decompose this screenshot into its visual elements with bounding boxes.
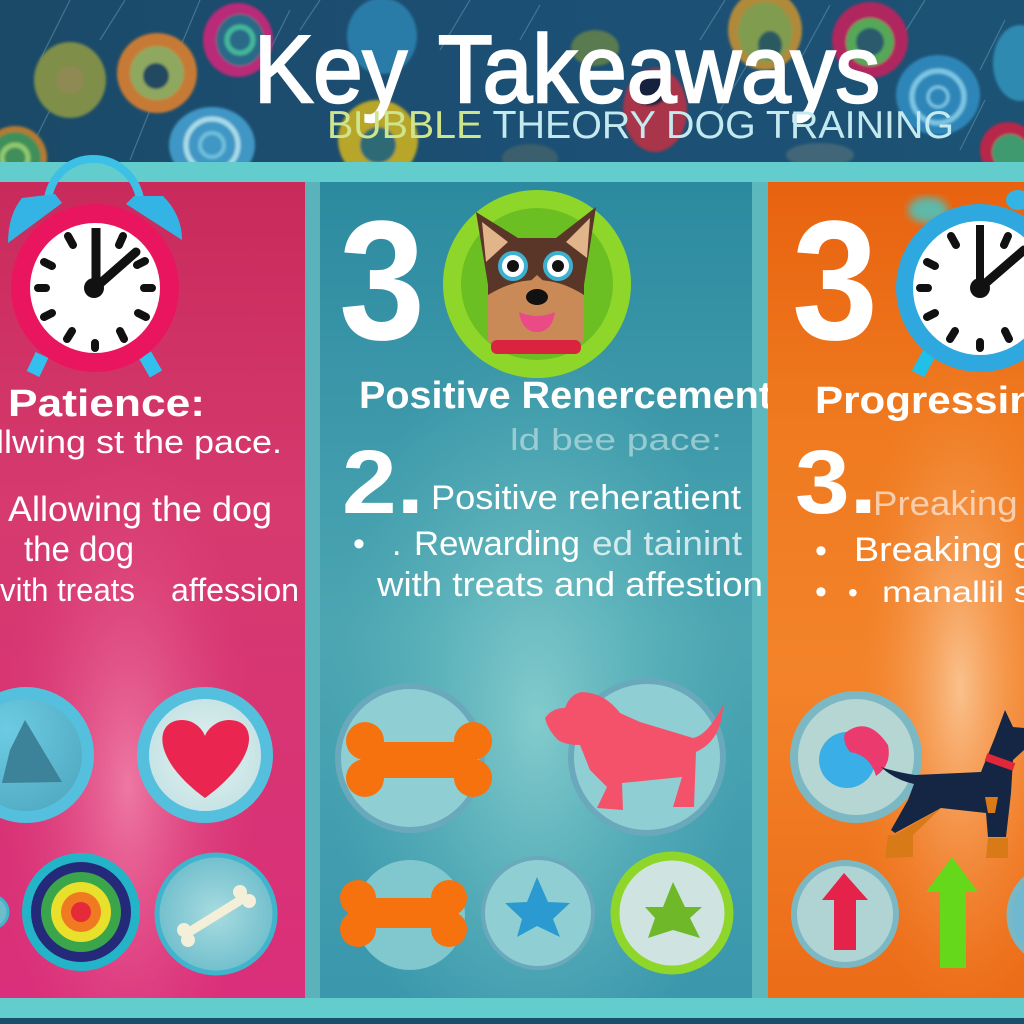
icon: small left bubble	[0, 896, 8, 928]
text block: manallil s	[882, 576, 1024, 609]
subtitle: BUBBLE THEORY DOG TRAINING	[327, 104, 954, 147]
text block: •	[848, 577, 858, 608]
icon: partial bubble right	[1009, 866, 1024, 964]
patience heading: Patience:	[8, 383, 205, 425]
patience text lines: the dog	[24, 530, 134, 569]
text block: .	[392, 525, 401, 563]
icon: target	[22, 853, 140, 971]
text block: Breaking g	[854, 531, 1024, 569]
icon: green star bubble	[615, 856, 729, 970]
patience text lines: vith treats	[0, 572, 135, 608]
icon: dog bubble	[545, 681, 723, 833]
icon: bone orange	[340, 880, 467, 947]
icon: black dog	[881, 710, 1024, 858]
big number 3: 3	[339, 186, 425, 376]
title	[254, 16, 880, 123]
icon: heart bubble	[143, 693, 267, 817]
patience text lines: Allowing the dog	[8, 490, 272, 529]
numbered item 2: 2.	[342, 433, 424, 533]
panel: positive reinforcement	[320, 182, 772, 998]
text block: Rewarding	[414, 525, 580, 563]
icon: bone bubble large	[338, 686, 492, 830]
icon: tree bubble	[0, 693, 88, 817]
patience text lines: affession	[171, 572, 299, 608]
text block: •	[815, 573, 827, 611]
progression heading: Progressin	[815, 380, 1024, 422]
faded line: ld bee pace:	[510, 422, 722, 457]
icon: green arrow	[926, 857, 978, 968]
text block: •	[353, 525, 365, 563]
icon: ball bubble	[794, 695, 918, 819]
numbered item 3: 3.	[795, 433, 877, 533]
patience text lines: llwing st the pace.	[0, 424, 282, 460]
header background	[0, 0, 1024, 190]
text block	[815, 485, 1024, 611]
icon: blue star bubble	[483, 858, 593, 968]
text block: •	[815, 532, 827, 570]
icon: red arrow bubble	[794, 863, 896, 965]
icon: dog face badge	[443, 190, 631, 378]
icon: bubble behind small bone	[355, 860, 465, 970]
title: Takeaways	[438, 16, 880, 123]
patience text lines	[0, 424, 299, 608]
panel: patience	[0, 159, 305, 998]
positive reinforcement heading: Positive Renercement	[359, 375, 772, 417]
text block: Positive reheratient	[431, 479, 742, 517]
big number 3: 3	[792, 186, 878, 376]
text block: with treats and affestion	[376, 566, 763, 604]
icon: bone bubble	[157, 855, 275, 973]
title: Key	[254, 16, 407, 123]
panel: progression	[768, 182, 1024, 998]
icon: alarm clock blue	[896, 190, 1024, 374]
text block: Preaking t	[873, 485, 1024, 523]
icon: alarm clock pink	[8, 159, 182, 374]
text block: ed tainint	[592, 525, 743, 563]
text block	[353, 479, 763, 604]
